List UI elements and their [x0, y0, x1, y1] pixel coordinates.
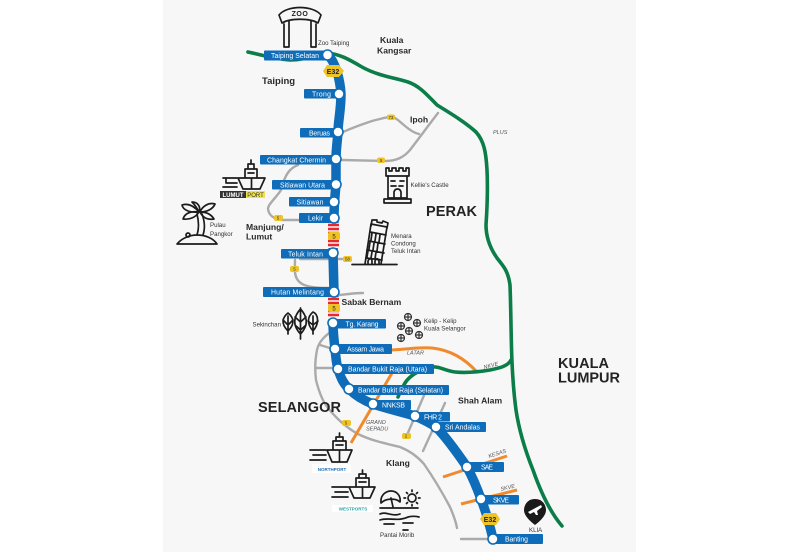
- station label: SAE: SAE: [481, 464, 493, 472]
- grey trunk roads: [268, 113, 487, 539]
- shield: E32 north: [323, 65, 344, 77]
- station label: Hutan Melintang: Hutan Melintang: [271, 290, 324, 296]
- station label: Banting: Banting: [505, 536, 528, 544]
- place labels: Lumut: [246, 232, 272, 242]
- station label: FHR 2: [415, 412, 450, 422]
- icon: palm island: [177, 202, 217, 244]
- icon: zoo gate: ZOO: [292, 11, 308, 18]
- station label: Teluk Intan: [281, 249, 333, 258]
- station label: Hutan Melintang: [263, 287, 334, 297]
- panel: map background: [163, 0, 636, 552]
- station label: Beruas: [300, 128, 338, 138]
- icon: Westports ship: WESTPORTS: [339, 506, 367, 512]
- place labels: Kangsar: [377, 46, 412, 56]
- icon: fireflies: [397, 313, 423, 342]
- E32 blue main line: [328, 55, 493, 539]
- place labels: Menara: [391, 233, 412, 240]
- place labels: [210, 35, 621, 539]
- station label: NNKSB: [373, 400, 411, 410]
- place labels: Kuala Selangor: [424, 326, 466, 332]
- place labels: Zoo Taiping: [318, 40, 349, 47]
- place labels: Sabak Bernam: [342, 297, 402, 307]
- small route shields: 5: [380, 158, 383, 163]
- red striped section north: [328, 223, 339, 248]
- station label: SKVE: [481, 495, 519, 504]
- small route shields: 5: [345, 421, 348, 426]
- place labels: Manjung/: [246, 222, 284, 232]
- place labels: Kuala: [380, 35, 404, 45]
- place labels: KUALA: [558, 356, 610, 372]
- place labels: Sekinchan: [252, 322, 281, 328]
- station label: SAE: [467, 462, 504, 472]
- place labels: Kelip - Kelip: [424, 318, 457, 325]
- place labels: Pangkor: [210, 231, 233, 238]
- station label: Sitiawan Utara: [272, 180, 336, 190]
- station label: Trong: [304, 89, 339, 98]
- station label: Beruas: Beruas: [309, 130, 331, 137]
- place labels: Pulau: [210, 222, 226, 229]
- place labels: KESAS: [488, 448, 507, 460]
- station label: Sitiawan Utara: Sitiawan Utara: [280, 182, 325, 189]
- place labels: SKVE: [500, 483, 516, 493]
- shield: route 5 south: 5: [332, 306, 336, 312]
- station label: Sitiawan: [289, 197, 334, 206]
- place labels: SEPADU: [366, 426, 388, 432]
- station label: Bandar Bukit Raja (Utara): Bandar Bukit Raja (Utara): [348, 366, 427, 374]
- shield: route 5 north: [328, 232, 340, 240]
- icon: Lumut Port ship: PORT: [247, 193, 264, 199]
- place labels: PERAK: [426, 204, 478, 220]
- station label: Lekir: Lekir: [308, 216, 324, 222]
- place labels: Pantai Morib: [380, 532, 415, 539]
- green PLUS highway: [248, 52, 562, 526]
- station label: Bandar Bukit Raja (Utara): [338, 364, 434, 374]
- station label: Trong: Trong: [312, 91, 331, 98]
- station label: Tg. Karang: [333, 319, 386, 328]
- place labels: Teluk Intan: [391, 248, 420, 255]
- station label: NNKSB: NNKSB: [382, 402, 405, 409]
- icon: Northport ship: [310, 433, 352, 473]
- shield: E32 south: E32: [484, 517, 496, 524]
- station label: Assam Jawa: Assam Jawa: [347, 346, 384, 354]
- place labels: Taiping: [262, 76, 295, 87]
- small route shields: 5: [277, 216, 280, 221]
- station label: Lekir: [299, 213, 334, 223]
- red striped section south: [328, 297, 339, 319]
- place labels: Ipoh: [410, 114, 428, 124]
- station markers: [322, 50, 498, 544]
- station label: Changkat Chermin: [260, 155, 336, 164]
- station label: Sri Andalas: Sri Andalas: [445, 424, 481, 432]
- place labels: LATAR: [407, 350, 424, 356]
- icon: zoo gate: [279, 8, 321, 47]
- station label: Assam Jawa: [335, 344, 392, 354]
- place labels: KLIA: [529, 527, 543, 534]
- station label: Sitiawan: Sitiawan: [296, 199, 324, 206]
- station label: Sri Andalas: [436, 422, 486, 432]
- shield: E32 south: [480, 513, 500, 525]
- station label: Bandar Bukit Raja (Selatan): [349, 385, 449, 395]
- place labels: Kellie's Castle: [410, 182, 449, 189]
- icon: paddy sheaves: [283, 308, 318, 339]
- station label: Tg. Karang: Tg. Karang: [346, 321, 379, 328]
- station label: Teluk Intan: Teluk Intan: [288, 251, 323, 258]
- small route shields: 5: [293, 267, 296, 272]
- icon: KLIA pin: [524, 499, 546, 525]
- station label: Taiping Selatan: [264, 50, 328, 60]
- icon: beach umbrella and sun: [380, 490, 420, 530]
- station label: Bandar Bukit Raja (Selatan): Bandar Bukit Raja (Selatan): [358, 388, 443, 394]
- station label: Banting: [493, 534, 543, 544]
- small route shields: 58: [345, 257, 350, 262]
- icon: Westports ship: [332, 470, 375, 512]
- small route shields: [274, 114, 411, 439]
- small route shields: 73: [389, 115, 394, 120]
- shield: E32 north: E32: [327, 69, 339, 76]
- icon: Lumut Port ship: LUMUT: [222, 193, 244, 199]
- place labels: Shah Alam: [458, 396, 502, 406]
- station label: SKVE: SKVE: [493, 497, 509, 504]
- place labels: PLUS: [493, 130, 508, 136]
- icon: Northport ship: NORTHPORT: [318, 467, 346, 472]
- orange expressways: [351, 348, 517, 504]
- icon: Lumut Port ship: [220, 160, 265, 199]
- place labels: SELANGOR: [258, 400, 342, 416]
- place labels: NKVE: [483, 361, 499, 371]
- place labels: Condong: [391, 240, 416, 248]
- station label: FHR 2: FHR 2: [424, 414, 442, 421]
- icon: Kellie's Castle: [384, 168, 411, 203]
- station label: Changkat Chermin: Changkat Chermin: [267, 157, 326, 164]
- place labels: LUMPUR: [558, 370, 621, 386]
- station label: Taiping Selatan: Taiping Selatan: [271, 53, 319, 60]
- shield: route 5 south: [328, 304, 340, 312]
- place labels: Klang: [386, 458, 410, 468]
- icon: leaning tower: [352, 220, 397, 264]
- shield: route 5 north: 5: [332, 234, 336, 240]
- place labels: GRAND: [366, 420, 386, 426]
- small route shields: 2: [405, 434, 408, 439]
